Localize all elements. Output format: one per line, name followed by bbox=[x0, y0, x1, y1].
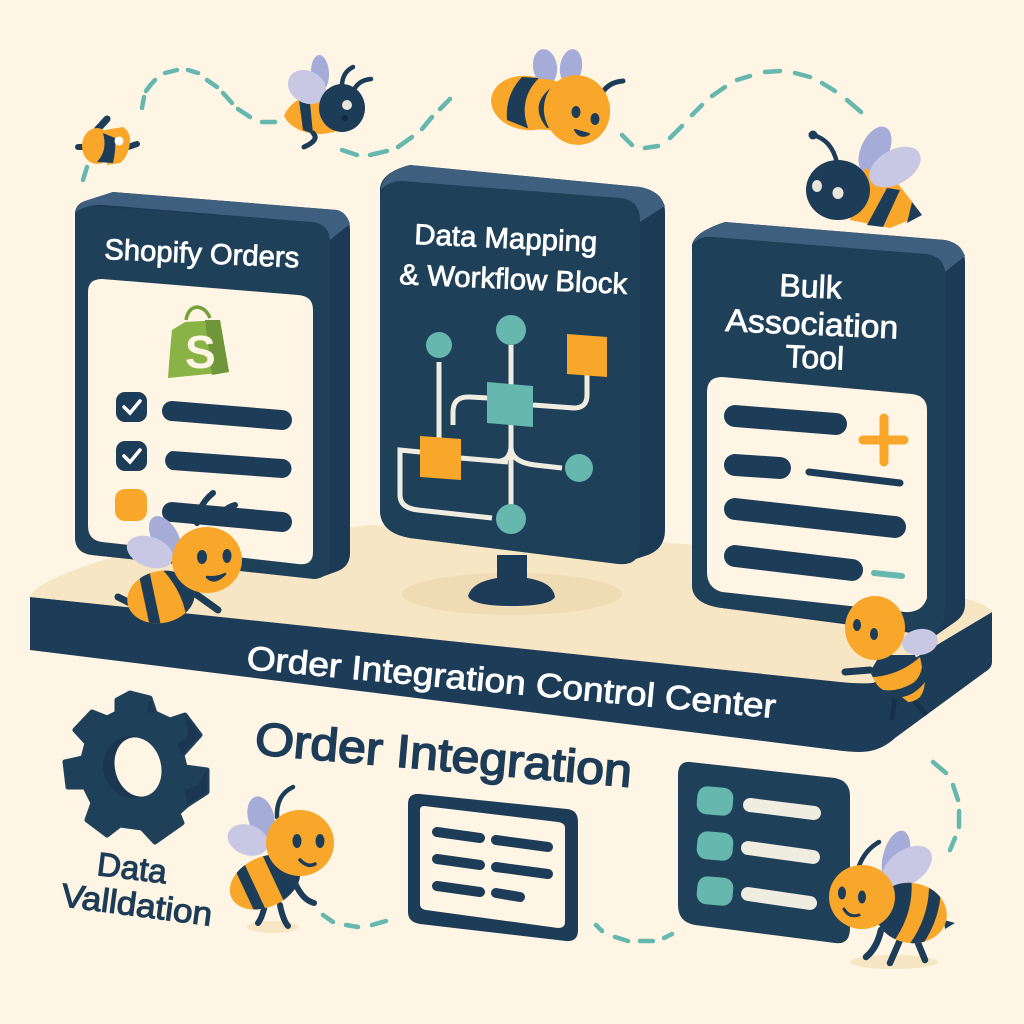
platform front bbox=[30, 597, 992, 752]
platform label: Order Integration Control Center bbox=[245, 640, 777, 726]
card bbox=[707, 377, 927, 612]
bee: flying navy head bbox=[282, 55, 371, 147]
bee: large top center bbox=[488, 48, 623, 152]
heading: Bulk bbox=[779, 267, 843, 306]
list rows bbox=[724, 405, 906, 581]
platform bbox=[30, 525, 992, 752]
platform top bbox=[30, 525, 992, 683]
text: Data Validation: Data bbox=[95, 845, 170, 891]
icon: shopify bag: S bbox=[185, 326, 216, 378]
list rows bbox=[115, 392, 292, 532]
card bbox=[88, 279, 313, 564]
panel: Data Mapping & Workflow Block monitor bbox=[380, 165, 665, 615]
heading: Data Mapping bbox=[414, 219, 598, 259]
panel: Bulk Association Tool: Tool bbox=[785, 338, 845, 377]
stand bbox=[468, 555, 555, 606]
bee: bottom left bbox=[219, 787, 334, 933]
dashed flight path: bottom bbox=[323, 762, 959, 941]
bee: on right platform corner bbox=[845, 596, 940, 718]
panel: Bulk Association Tool: Association bbox=[725, 302, 899, 346]
icon: shopify bag bbox=[168, 307, 229, 378]
bee: perched on right panel bbox=[806, 121, 928, 228]
panel: Shopify Orders bbox=[75, 192, 350, 579]
bee: on left platform bbox=[118, 493, 242, 643]
flow diagram bbox=[400, 315, 607, 534]
bee: small top left bbox=[78, 119, 137, 165]
text: Data Validation: Valldation bbox=[59, 876, 215, 933]
body bbox=[380, 165, 665, 564]
heading: Shopify Orders bbox=[104, 234, 300, 274]
icon: gear bbox=[65, 693, 207, 842]
title: Order Integration bbox=[253, 712, 634, 797]
shadow bbox=[402, 573, 622, 615]
dashed flight path: top bbox=[83, 70, 861, 180]
icon: table card bbox=[408, 794, 578, 941]
panel: Bulk Association Tool bbox=[692, 222, 965, 636]
panel: Data Mapping & Workflow Block monitor: & Workflow Block bbox=[399, 259, 628, 301]
bee: bottom right bbox=[829, 828, 955, 969]
icon: checklist panel bbox=[678, 762, 850, 943]
text: Data Validation bbox=[59, 845, 215, 933]
